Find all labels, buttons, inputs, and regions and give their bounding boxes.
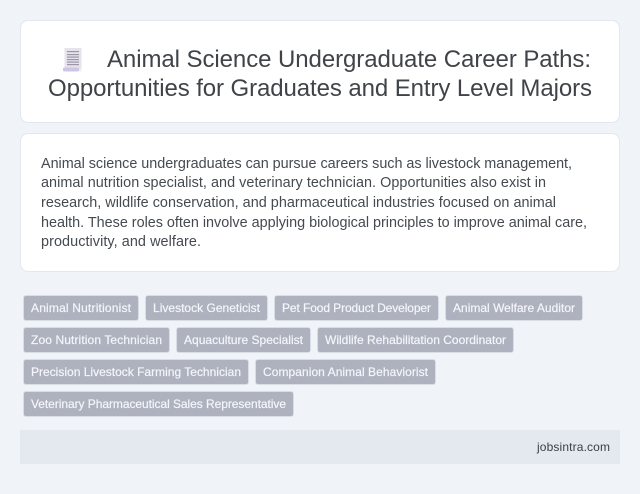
- heading: title: [48, 46, 592, 102]
- tag: Wildlife Rehabilitation Coordinator: Wildlife Rehabilitation Coordinator: [325, 333, 506, 347]
- tag: Animal Welfare Auditor: [445, 295, 583, 321]
- tag: Precision Livestock Farming Technician: Precision Livestock Farming Technician: [31, 365, 241, 379]
- tag: Animal Welfare Auditor: Animal Welfare Auditor: [453, 301, 575, 315]
- panel: description card: [20, 133, 620, 272]
- icon: document scroll: [63, 48, 82, 72]
- heading: title: Animal Science Undergraduate Career Paths:: [107, 46, 591, 73]
- tag: Zoo Nutrition Technician: Zoo Nutrition Technician: [31, 333, 162, 347]
- tag: Precision Livestock Farming Technician: [23, 359, 249, 385]
- tag: Livestock Geneticist: Livestock Geneticist: [153, 301, 261, 315]
- panel: description card: research, wildlife conservation, and pharmaceutical industries focused on animal: [41, 195, 556, 211]
- text block: description: [41, 156, 587, 250]
- tag: Zoo Nutrition Technician: [23, 327, 170, 353]
- tag: Companion Animal Behaviorist: [255, 359, 436, 385]
- heading: title: Opportunities for Graduates and Entry Level Majors: [48, 75, 592, 102]
- tag: Livestock Geneticist: [145, 295, 268, 321]
- panel: description card: Animal science undergraduates can pursue careers such as livestock management,: [41, 156, 572, 172]
- tag: Animal Nutritionist: Animal Nutritionist: [31, 301, 132, 315]
- panel: description card: health. These roles often involve applying biological principles to improve animal care,: [41, 215, 587, 231]
- tag: Veterinary Pharmaceutical Sales Representative: Veterinary Pharmaceutical Sales Representative: [31, 397, 286, 411]
- tag: Pet Food Product Developer: [274, 295, 439, 321]
- panel: description card: animal nutrition specialist, and veterinary technician. Opportunities also exist in: [41, 175, 546, 191]
- tag: Companion Animal Behaviorist: Companion Animal Behaviorist: [263, 365, 429, 379]
- tag: Aquaculture Specialist: [176, 327, 311, 353]
- panel: title card: [20, 20, 620, 123]
- panel: description card: productivity, and welfare.: [41, 234, 201, 250]
- tag: Animal Nutritionist: [23, 295, 139, 321]
- tag: Aquaculture Specialist: Aquaculture Specialist: [184, 333, 304, 347]
- tag: Veterinary Pharmaceutical Sales Representative: [23, 391, 294, 417]
- footer bar: [20, 430, 620, 464]
- footer text: jobsintra.com: jobsintra.com: [536, 440, 610, 454]
- tag: Wildlife Rehabilitation Coordinator: [317, 327, 514, 353]
- tag: Pet Food Product Developer: Pet Food Product Developer: [282, 301, 431, 315]
